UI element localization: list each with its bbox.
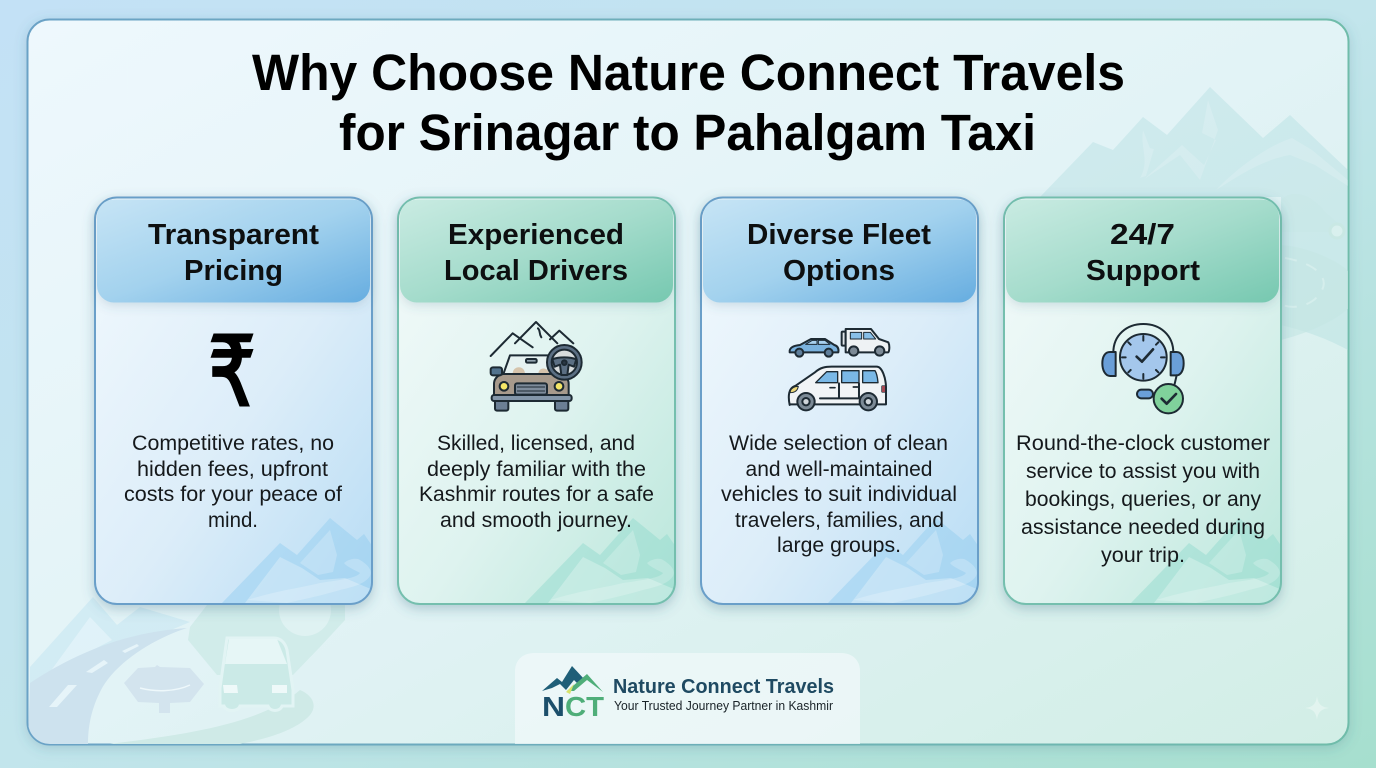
card watermark <box>222 518 373 604</box>
heading: 24/7 <box>1110 219 1175 251</box>
title: Why Choose Nature Connect Travels <box>252 44 1125 101</box>
pin and clock <box>188 605 345 675</box>
heading: Diverse Fleet <box>747 219 931 251</box>
heading <box>747 219 931 287</box>
heading: Transparent <box>148 219 319 251</box>
card header <box>400 200 673 302</box>
description: vehicles to suit individual <box>721 483 957 506</box>
road bend <box>110 690 314 744</box>
description <box>1016 432 1270 567</box>
card header <box>97 200 370 302</box>
logo mark: NCT mountains <box>542 666 604 722</box>
description: mind. <box>208 509 258 532</box>
description: and smooth journey. <box>440 509 632 532</box>
tagline: Your Trusted Journey Partner in Kashmir <box>614 698 834 713</box>
logo panel <box>515 653 860 744</box>
card header <box>1006 200 1279 302</box>
heading: Experienced <box>448 219 624 251</box>
description: Skilled, licensed, and <box>437 432 635 455</box>
logo name: Nature Connect Travels <box>613 676 834 698</box>
description: service to assist you with <box>1026 460 1260 483</box>
heading <box>1086 219 1200 287</box>
description <box>721 432 957 557</box>
heading: Pricing <box>184 255 283 287</box>
icon: headset clock <box>1102 324 1184 413</box>
card 4: 24/7 Support <box>1004 198 1282 604</box>
card watermark <box>1131 518 1282 604</box>
icon: car with steering wheel and mountains <box>491 322 582 411</box>
description: Kashmir routes for a safe <box>419 483 654 506</box>
icon: rupee: ₹ <box>208 316 256 428</box>
description: Wide selection of clean <box>729 432 948 455</box>
description: your trip. <box>1101 544 1185 567</box>
description: large groups. <box>777 534 901 557</box>
title <box>252 44 1125 161</box>
card header <box>703 200 976 302</box>
card 1: Transparent Pricing <box>95 198 373 604</box>
card 2: Experienced Local Drivers <box>398 198 676 604</box>
description: Round-the-clock customer <box>1016 432 1270 455</box>
heading: Local Drivers <box>444 255 628 287</box>
heading <box>148 219 319 287</box>
heading: Options <box>783 255 895 287</box>
watermark: road, sign and bus, bottom left <box>28 584 345 744</box>
description: deeply familiar with the <box>427 458 646 481</box>
card watermark <box>828 518 979 604</box>
icon: sparkle <box>1305 696 1329 720</box>
title: for Srinagar to Pahalgam Taxi <box>339 104 1036 161</box>
logo mark: NCT mountains: N <box>542 691 565 722</box>
card watermark <box>525 518 676 604</box>
sign post <box>124 665 204 713</box>
heading: Support <box>1086 255 1200 287</box>
mountains <box>30 597 190 683</box>
description: costs for your peace of <box>124 483 342 506</box>
description: hidden fees, upfront <box>137 458 328 481</box>
description: travelers, families, and <box>735 509 944 532</box>
description <box>124 432 342 532</box>
description <box>419 432 654 532</box>
logo mark: NCT mountains: CT <box>565 691 604 722</box>
bus <box>220 638 293 710</box>
description: assistance needed during <box>1021 516 1265 539</box>
heading <box>444 219 628 287</box>
watermark: mountains and van, top right <box>1040 87 1349 350</box>
icon: sedan, SUV and van <box>789 329 889 410</box>
description: and well-maintained <box>746 458 932 481</box>
road <box>28 628 187 744</box>
description: bookings, queries, or any <box>1025 488 1262 511</box>
card 3: Diverse Fleet Options <box>701 198 979 604</box>
description: Competitive rates, no <box>132 432 334 455</box>
